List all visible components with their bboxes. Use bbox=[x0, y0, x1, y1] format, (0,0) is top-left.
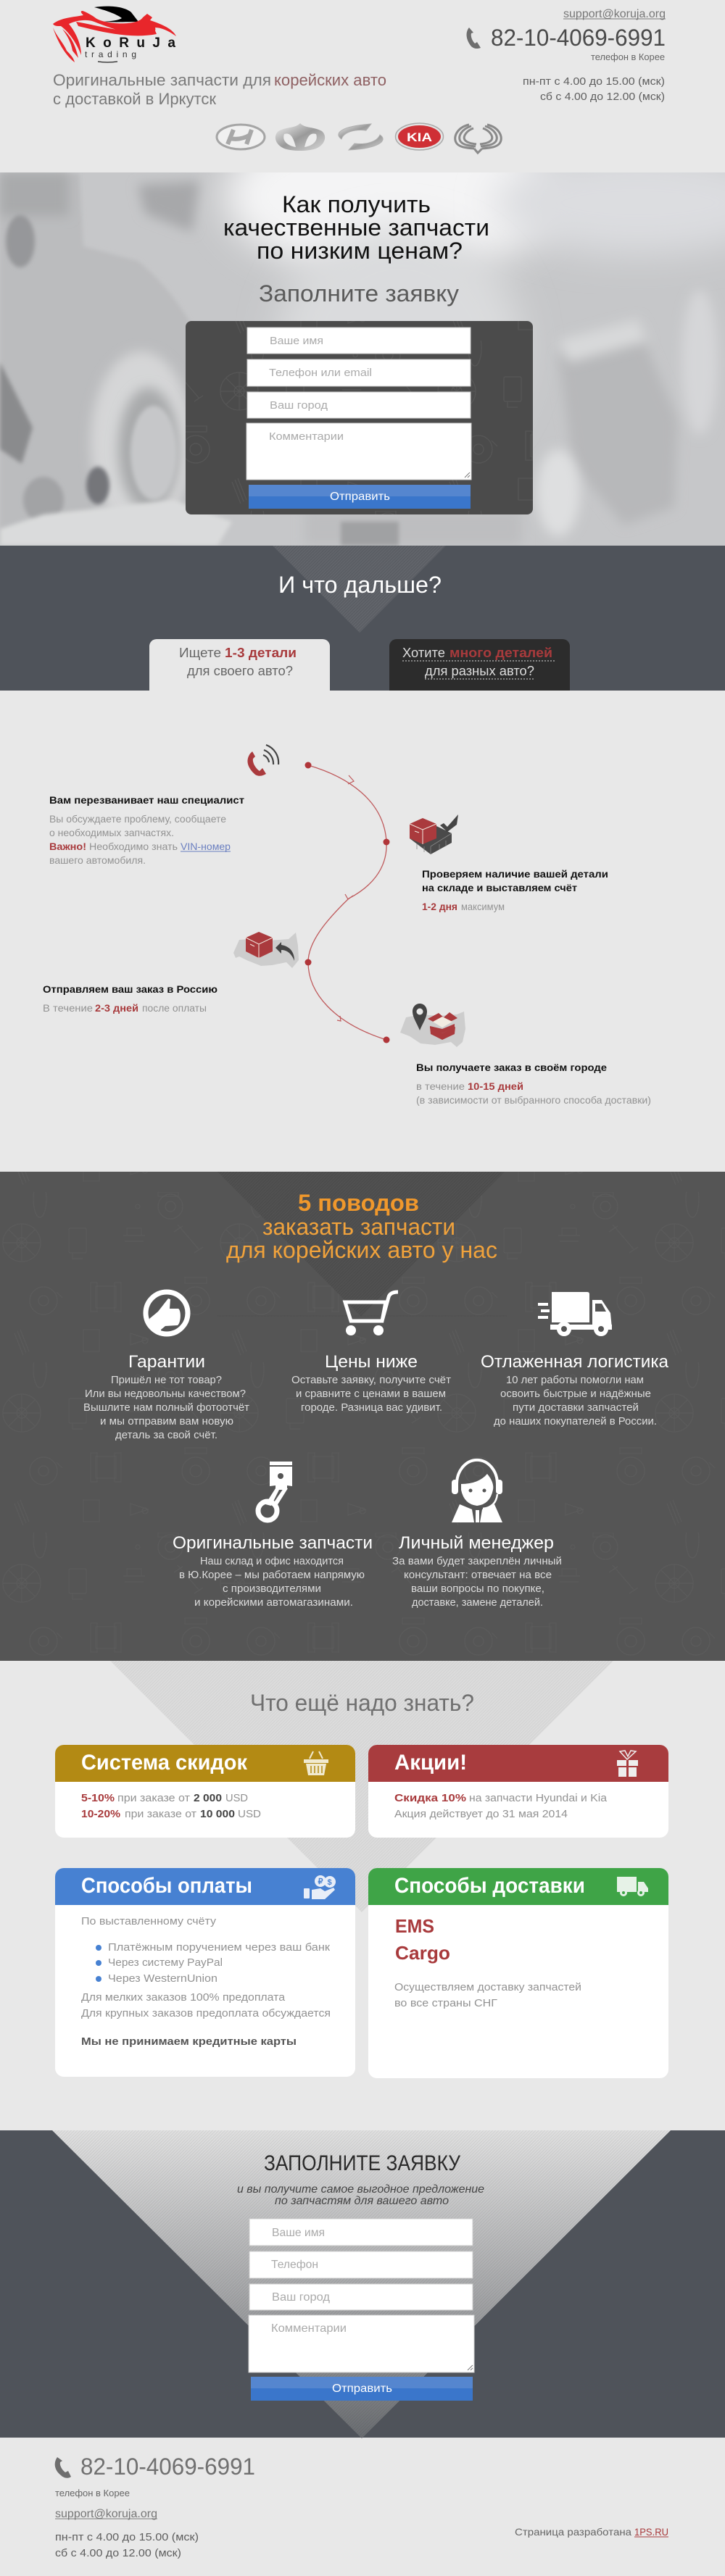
tab: many parts: Хотите bbox=[402, 646, 445, 660]
input: city: Ваш город bbox=[272, 2291, 331, 2304]
icon: KIA bbox=[396, 123, 444, 150]
text bbox=[291, 1374, 451, 1414]
text: консультант: отвечает на все bbox=[404, 1569, 552, 1581]
card text bbox=[394, 1981, 581, 2009]
reason: lower prices bbox=[291, 1292, 451, 1414]
card text: Акция действует до 31 мая 2014 bbox=[394, 1808, 568, 1820]
text bbox=[83, 1374, 249, 1441]
panel: delivery methods bbox=[368, 1868, 668, 2078]
card title: Способы оплаты bbox=[81, 1874, 252, 1898]
text: Вышлите нам полный фотоотчёт bbox=[83, 1401, 249, 1414]
title: Цены ниже bbox=[325, 1352, 418, 1372]
tab: few parts: 1-3 детали bbox=[225, 646, 297, 660]
heading: Что ещё надо знать? bbox=[250, 1690, 474, 1716]
text: За вами будет закреплён личный bbox=[392, 1555, 562, 1567]
text bbox=[494, 1374, 657, 1427]
step title: Вам перезванивает наш специалист bbox=[49, 794, 244, 806]
brand logos bbox=[217, 123, 501, 153]
card text: на запчасти Hyundai и Kia bbox=[469, 1792, 608, 1804]
text: доставке, замене деталей. bbox=[412, 1596, 543, 1609]
icon: thumb up bbox=[146, 1292, 188, 1335]
icon: boxes with check bbox=[410, 814, 458, 854]
heading: заказать запчасти bbox=[262, 1214, 455, 1240]
step text: в течение bbox=[416, 1080, 465, 1092]
button: submit bbox=[249, 485, 471, 509]
icon: money in hand bbox=[304, 1875, 336, 1899]
icon: delivery truck bbox=[617, 1877, 648, 1896]
icon: KIA: KIA bbox=[407, 130, 432, 144]
step title bbox=[422, 868, 608, 893]
icon: phone bbox=[55, 2457, 71, 2478]
text: Или вы недовольны качеством? bbox=[85, 1388, 246, 1400]
heading: ЗАПОЛНИТЕ ЗАЯВКУ bbox=[264, 2151, 461, 2175]
text: 10 лет работы помогли нам bbox=[506, 1374, 644, 1386]
title: Отлаженная логистика bbox=[481, 1352, 669, 1372]
step text: В течение bbox=[43, 1002, 93, 1014]
step text bbox=[49, 813, 231, 866]
step title: на складе и выставляем счёт bbox=[422, 882, 577, 893]
step title: Вы получаете заказ в своём городе bbox=[416, 1062, 607, 1073]
icon: Samsung motors bbox=[339, 124, 383, 150]
card title: Акции! bbox=[394, 1751, 467, 1775]
icon: money in hand: $ bbox=[328, 1878, 332, 1887]
card text: 5-10% bbox=[81, 1792, 115, 1804]
input: city bbox=[247, 392, 471, 418]
tab: many parts: для разных авто? bbox=[425, 664, 534, 678]
text bbox=[179, 1555, 365, 1609]
step 2 bbox=[410, 814, 608, 912]
card header bbox=[55, 1745, 355, 1782]
text: Оставьте заявку, получите счёт bbox=[291, 1374, 451, 1386]
no credit cards note: Мы не принимаем кредитные карты bbox=[81, 2035, 297, 2048]
step text: 10-15 дней bbox=[468, 1080, 523, 1092]
section: five reasons bbox=[0, 1172, 725, 1661]
step 3 bbox=[43, 932, 299, 1014]
delivery options bbox=[395, 1915, 450, 1964]
process timeline curve bbox=[304, 762, 390, 1043]
payment list: Платёжным поручением через ваш банк bbox=[108, 1941, 330, 1954]
triangle decoration bbox=[52, 2130, 671, 2438]
working hours: сб с 4.00 до 12.00 (мск) bbox=[55, 2547, 181, 2559]
developer credit: 1PS.RU bbox=[634, 2526, 668, 2538]
subheading: и вы получите самое выгодное предложение bbox=[237, 2183, 484, 2196]
title: Гарантии bbox=[128, 1352, 205, 1372]
text: и корейскими автомагазинами. bbox=[194, 1596, 353, 1609]
subheading bbox=[237, 2183, 484, 2207]
header bbox=[53, 7, 666, 153]
tagline: корейских авто bbox=[274, 71, 386, 89]
icon: headset operator bbox=[452, 1460, 502, 1522]
step text: (в зависимости от выбранного способа доставки) bbox=[416, 1094, 651, 1106]
step text: о необходимых запчастях. bbox=[49, 827, 174, 838]
step title: Проверяем наличие вашей детали bbox=[422, 868, 608, 880]
card header bbox=[55, 1868, 355, 1905]
payment list: Через систему PayPal bbox=[108, 1956, 223, 1969]
footer bbox=[55, 2454, 668, 2559]
step text: Необходимо знать bbox=[89, 841, 178, 852]
text: с производителями bbox=[223, 1583, 321, 1595]
text: городе. Разница вас удивит. bbox=[301, 1401, 442, 1414]
icon: SsangYong bbox=[455, 125, 501, 153]
button: submit bbox=[251, 2377, 473, 2401]
working hours: сб с 4.00 до 12.00 (мск) bbox=[540, 91, 665, 103]
text: освоить быстрые и надёжные bbox=[500, 1388, 651, 1400]
phone number: 82-10-4069-6991 bbox=[80, 2454, 255, 2480]
phone note: телефон в Корее bbox=[55, 2488, 130, 2498]
hero heading: качественные запчасти bbox=[223, 214, 489, 241]
tagline: с доставкой в Иркутск bbox=[53, 90, 216, 108]
step text: Важно! bbox=[49, 841, 86, 852]
triangle decoration bbox=[273, 546, 446, 633]
icon: pin and open box bbox=[400, 1004, 465, 1047]
working hours bbox=[523, 75, 665, 103]
text: в Ю.Корее – мы работаем напрямую bbox=[179, 1569, 365, 1581]
reason: logistics bbox=[481, 1292, 669, 1427]
text: Наш склад и офис находится bbox=[200, 1555, 344, 1567]
card text: при заказе от bbox=[117, 1792, 190, 1804]
tab: few parts bbox=[149, 639, 330, 691]
text: Пришёл не тот товар? bbox=[111, 1374, 222, 1386]
icon: piston bbox=[258, 1462, 292, 1520]
payment list: Через WesternUnion bbox=[108, 1972, 218, 1985]
input: comments: Комментарии bbox=[271, 2322, 347, 2335]
tagline bbox=[53, 71, 386, 108]
reason: original parts bbox=[173, 1462, 373, 1609]
tab: few parts: для своего авто? bbox=[187, 664, 293, 678]
phone note: телефон в Корее bbox=[591, 51, 665, 62]
phone number: 82-10-4069-6991 bbox=[491, 25, 666, 51]
heading: для корейских авто у нас bbox=[226, 1237, 497, 1263]
text bbox=[392, 1555, 562, 1609]
step text: VIN-номер bbox=[181, 841, 231, 852]
input: name bbox=[249, 2219, 473, 2246]
payment list bbox=[96, 1941, 330, 1985]
working hours: пн-пт с 4.00 до 15.00 (мск) bbox=[55, 2531, 199, 2543]
icon: phone bbox=[467, 28, 481, 49]
icon: phone call bbox=[247, 745, 278, 776]
card title: Система скидок bbox=[81, 1751, 248, 1775]
card header bbox=[368, 1745, 668, 1782]
card text: при заказе от bbox=[125, 1808, 196, 1820]
text: деталь за свой счёт. bbox=[115, 1429, 218, 1441]
step text: Вы обсуждаете проблему, сообщаете bbox=[49, 813, 226, 825]
section: bottom form bbox=[0, 2130, 725, 2438]
contact email: support@koruja.org bbox=[563, 8, 666, 20]
working hours: пн-пт с 4.00 до 15.00 (мск) bbox=[523, 75, 665, 88]
tab: many parts bbox=[389, 639, 570, 691]
step text: 1-2 дня bbox=[422, 901, 457, 912]
hero section background: blurred engine photo bbox=[0, 172, 725, 546]
contact email: support@koruja.org bbox=[55, 2508, 157, 2520]
panel: hero form bbox=[186, 321, 533, 514]
heading: И что дальше? bbox=[278, 572, 442, 598]
input: name bbox=[247, 328, 471, 354]
card text bbox=[394, 1792, 608, 1820]
working hours bbox=[55, 2531, 199, 2559]
prepayment terms: Для крупных заказов предоплата обсуждается bbox=[81, 2007, 331, 2019]
hero heading bbox=[223, 191, 489, 264]
input: city bbox=[249, 2284, 473, 2310]
text: и мы отправим вам новую bbox=[100, 1415, 233, 1427]
text: пути доставки запчастей bbox=[513, 1401, 639, 1414]
icon: money in hand: ₽ bbox=[318, 1877, 323, 1886]
icon: Daewoo bbox=[276, 123, 325, 151]
card text: USD bbox=[238, 1808, 261, 1820]
title: Личный менеджер bbox=[399, 1533, 554, 1553]
input: comments: Комментарии bbox=[269, 430, 344, 443]
step text bbox=[422, 901, 505, 912]
step text: 2-3 дней bbox=[95, 1002, 138, 1014]
card text: 10 000 bbox=[200, 1808, 235, 1820]
prepayment terms: Для мелких заказов 100% предоплата bbox=[81, 1991, 286, 2004]
tagline: Оригинальные запчасти для bbox=[53, 71, 271, 89]
panel: payment methods bbox=[55, 1868, 355, 2077]
card text: USD bbox=[225, 1792, 248, 1804]
form heading: Заполните заявку bbox=[259, 280, 459, 307]
logo: KoRuJa trading bbox=[53, 7, 176, 62]
logo: KoRuJa trading: trading bbox=[85, 49, 136, 59]
subheading: по запчастям для вашего авто bbox=[275, 2195, 449, 2207]
step title: Отправляем ваш заказ в Россию bbox=[43, 983, 218, 995]
button: submit: Отправить bbox=[330, 491, 390, 503]
card title: Способы доставки bbox=[394, 1874, 585, 1898]
logo: KoRuJa trading: KoRuJa bbox=[86, 36, 175, 51]
card text bbox=[81, 1792, 261, 1820]
icon: box shipped to Russia bbox=[233, 932, 299, 968]
title: Оригинальные запчасти bbox=[173, 1533, 373, 1553]
card text: Скидка 10% bbox=[394, 1792, 466, 1804]
card text: во все страны СНГ bbox=[394, 1997, 497, 2009]
step 4 bbox=[400, 1004, 651, 1106]
card text: По выставленному счёту bbox=[81, 1915, 217, 1927]
input: comments bbox=[249, 2315, 474, 2372]
input: phone bbox=[249, 2251, 473, 2278]
heading: 5 поводов bbox=[298, 1190, 419, 1216]
input: phone: Телефон bbox=[271, 2259, 318, 2271]
card text: 2 000 bbox=[194, 1792, 222, 1804]
tab: few parts: Ищете bbox=[179, 646, 221, 660]
hero heading: по низким ценам? bbox=[257, 238, 463, 264]
step text bbox=[416, 1080, 651, 1106]
input: name: Ваше имя bbox=[270, 335, 323, 347]
triangle decoration bbox=[110, 1661, 613, 1912]
step 1 bbox=[49, 745, 278, 866]
card text: 10-20% bbox=[81, 1808, 120, 1820]
text: до наших покупателей в России. bbox=[494, 1415, 657, 1427]
card text: Осуществляем доставку запчастей bbox=[394, 1981, 581, 1993]
hero heading: Как получить bbox=[282, 191, 431, 217]
icon: Hyundai bbox=[217, 125, 265, 149]
reason: personal manager bbox=[392, 1460, 562, 1609]
text: и сравните с ценами в вашем bbox=[296, 1388, 446, 1400]
tab: many parts: много деталей bbox=[450, 646, 552, 660]
text: ваши вопросы по покупке, bbox=[411, 1583, 544, 1595]
panel: promotions bbox=[368, 1745, 668, 1838]
delivery options: Cargo bbox=[395, 1942, 450, 1964]
input: comments bbox=[246, 423, 471, 480]
button: submit: Отправить bbox=[332, 2383, 392, 2395]
section: what next bbox=[0, 546, 725, 691]
input: contact: Телефон или email bbox=[269, 367, 372, 379]
input: city: Ваш город bbox=[270, 399, 328, 412]
input: contact bbox=[247, 359, 471, 386]
step text bbox=[43, 1002, 207, 1014]
icon: basket bbox=[304, 1751, 328, 1775]
step text: вашего автомобиля. bbox=[49, 854, 146, 866]
section: more info bbox=[55, 1661, 668, 2078]
reason: guarantee bbox=[83, 1292, 249, 1441]
icon: truck bbox=[538, 1292, 612, 1336]
prepayment terms bbox=[81, 1991, 331, 2019]
icon: cart bbox=[345, 1292, 398, 1335]
panel: discounts bbox=[55, 1745, 355, 1838]
step text: максимум bbox=[461, 901, 505, 912]
icon: gift bbox=[617, 1751, 638, 1777]
input: name: Ваше имя bbox=[272, 2227, 325, 2239]
developer credit: Страница разработана bbox=[515, 2526, 631, 2538]
heading bbox=[226, 1190, 497, 1263]
step text: после оплаты bbox=[142, 1002, 207, 1014]
triangle decoration bbox=[218, 1172, 505, 1317]
delivery options: EMS bbox=[395, 1915, 434, 1937]
card header bbox=[368, 1868, 668, 1905]
